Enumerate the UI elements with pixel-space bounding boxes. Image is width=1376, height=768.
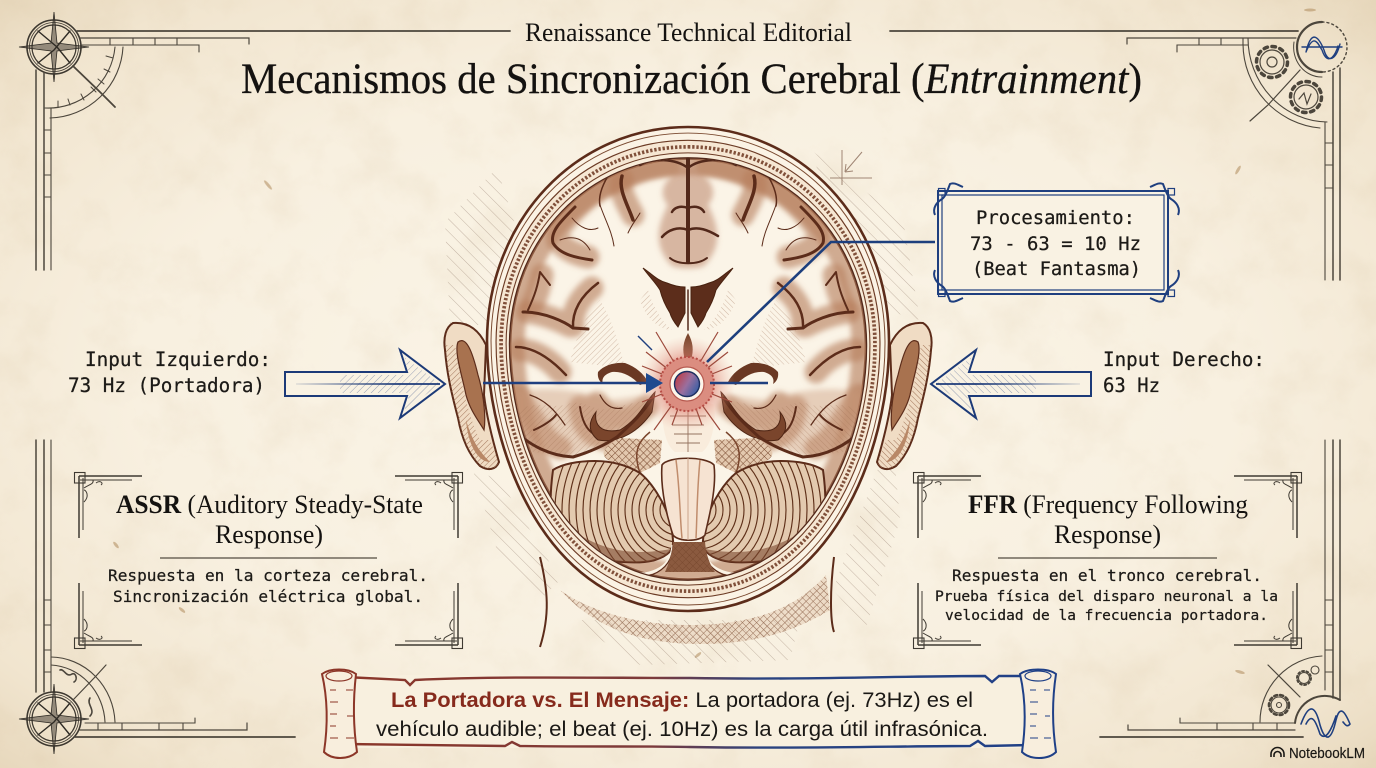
panel: FFR: Prueba física del disparo neuronal a la (935, 588, 1278, 605)
midline fissure (640, 156, 736, 330)
input right label (1103, 348, 1265, 397)
arrow: left input (285, 350, 445, 418)
panel: ASSR: Sincronización eléctrica global. (113, 587, 423, 606)
panel: ASSR (74, 472, 462, 648)
arrow: right input (931, 350, 1091, 418)
panel: FFR: FFR (Frequency Following (968, 489, 1248, 519)
input right label: 63 Hz (1103, 374, 1160, 397)
panel: ASSR: ASSR (Auditory Steady-State (116, 489, 423, 519)
sketch crosshair mark (830, 150, 872, 185)
callout: Procesamiento (934, 183, 1179, 302)
title block: Mecanismos de Sincronización Cerebral (Entrainment) (241, 56, 1142, 103)
callout: Procesamiento: (Beat Fantasma) (972, 258, 1141, 280)
callout: Procesamiento: 73 - 63 = 10 Hz (970, 233, 1141, 255)
third ventricle (683, 333, 693, 360)
left hemisphere (510, 158, 686, 576)
brain stem ticks (670, 412, 706, 452)
brain stem (663, 413, 714, 452)
fourth ventricle hatching (665, 542, 715, 572)
midline shading (659, 165, 717, 268)
left roller (322, 670, 357, 758)
callout: Procesamiento: Procesamiento: (976, 207, 1135, 229)
NotebookLM logo: NotebookLM (1289, 745, 1365, 762)
banner: La Portadora vs. El Mensaje scroll: vehículo audible; el beat (ej. 10Hz) es la carga útil infrasónica. (376, 717, 988, 741)
icon: wave (1301, 709, 1350, 737)
input left label: Input Izquierdo: (85, 348, 271, 371)
panel: ASSR: Respuesta en la corteza cerebral. (108, 566, 428, 585)
panel: ASSR: Response) (215, 519, 323, 549)
icon: gears (1269, 666, 1319, 715)
head cross-section (487, 127, 889, 633)
panel: FFR (914, 472, 1302, 648)
banner: La Portadora vs. El Mensaje scroll (322, 670, 1056, 758)
signal arrows in brain (483, 336, 768, 393)
input left label (68, 348, 271, 397)
frame: bottom right corner (1100, 440, 1350, 737)
head hatching background (445, 147, 920, 665)
input right label: Input Derecho: (1103, 348, 1265, 371)
neck (540, 557, 834, 647)
right hemisphere (690, 158, 866, 576)
skull layers (487, 127, 889, 611)
brain (510, 158, 866, 580)
icon: gear bottom (1290, 82, 1322, 112)
title block (241, 18, 1142, 103)
frame: bottom left corner (19, 440, 295, 754)
icon: wave seal (1294, 22, 1347, 77)
frame: top right corner (890, 22, 1347, 280)
banner: La Portadora vs. El Mensaje scroll: La Portadora vs. El Mensaje: La portadora (ej. 73Hz) es el (391, 688, 973, 712)
input left label: 73 Hz (Portadora) (68, 374, 265, 397)
panel: FFR: Respuesta en el tronco cerebral. (952, 566, 1262, 585)
title block: Renaissance Technical Editorial (525, 18, 852, 47)
callout connector line (707, 242, 935, 362)
panel: FFR: velocidad de la frecuencia portadora. (945, 607, 1268, 624)
frame: top left corner (19, 12, 510, 270)
icon: gear top (1256, 46, 1288, 78)
ear: left (444, 323, 499, 469)
panel: FFR: Response) (1054, 519, 1161, 549)
ear: right (877, 323, 932, 469)
right roller (1020, 670, 1056, 758)
vermis (662, 458, 715, 540)
target: thalamus entrainment point (639, 332, 735, 432)
